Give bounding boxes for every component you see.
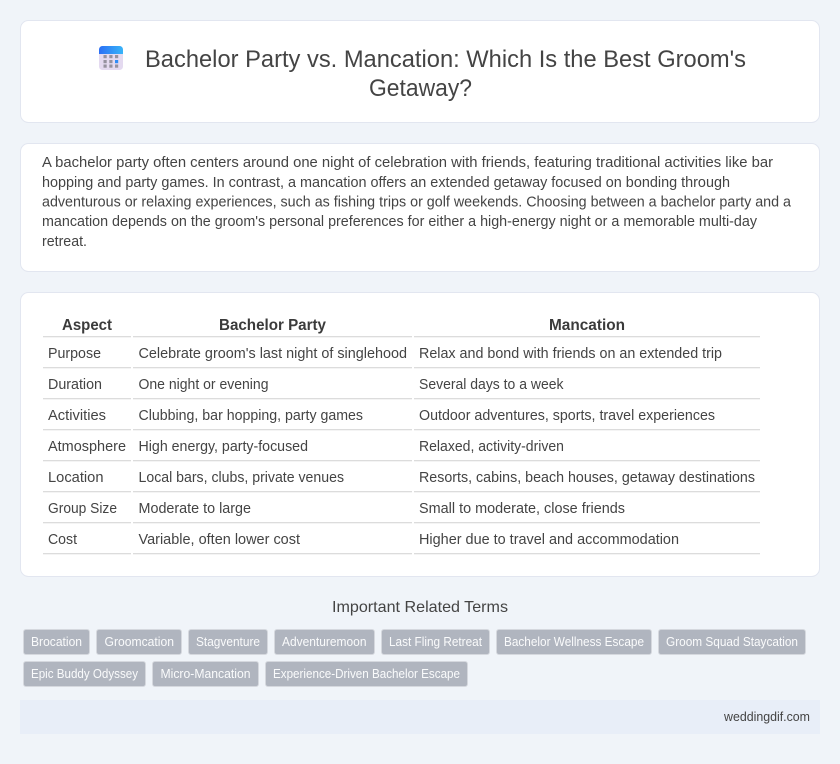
text block: introduction paragraph: adventurous or relaxing experiences, such as fishing trips or golf weekends. Choosing between a bachelor party and a <box>42 194 792 210</box>
tag: Brocation <box>24 630 90 654</box>
table header row <box>43 317 760 337</box>
table row: Activities: Clubbing, bar hopping, party games <box>138 408 363 424</box>
tag: Groom Squad Staycation: Groom Squad Staycation <box>666 634 798 649</box>
title: Getaway? <box>369 75 472 102</box>
text block: introduction paragraph: hopping and party games. In contrast, a mancation offers an extended getaway focused on bonding through <box>42 175 730 191</box>
tag: Groomcation <box>96 630 182 654</box>
footer <box>20 700 820 734</box>
tag: Groomcation: Groomcation <box>104 634 174 649</box>
table row: Duration: One night or evening <box>138 377 268 393</box>
panel: header <box>20 20 820 122</box>
table row: Location <box>43 470 760 492</box>
table row: Atmosphere: Relaxed, activity-driven <box>419 439 564 455</box>
tag: Experience-Driven Bachelor Escape <box>266 662 468 686</box>
table row: Cost: Variable, often lower cost <box>138 532 300 548</box>
table row: Group Size: Group Size <box>48 501 117 517</box>
table row: Group Size <box>43 501 760 523</box>
tag: Epic Buddy Odyssey <box>24 662 146 686</box>
tag: Adventuremoon: Adventuremoon <box>282 634 366 649</box>
text block: introduction paragraph: retreat. <box>42 234 87 250</box>
table row: Cost: Higher due to travel and accommodation <box>419 532 679 548</box>
tag: Micro-Mancation: Micro-Mancation <box>160 666 250 681</box>
table row: Activities <box>43 408 760 430</box>
table row: Duration: Several days to a week <box>419 377 564 393</box>
text block: introduction paragraph <box>42 155 792 250</box>
text block: introduction paragraph: mancation depends on the groom's personal preferences for either a high-energy night or a memorable multi-day <box>42 214 758 230</box>
table row: Cost <box>43 532 760 554</box>
panel: introduction <box>20 144 820 272</box>
table row: Cost: Cost <box>48 532 77 548</box>
tag: Stagventure: Stagventure <box>196 634 260 649</box>
tag: Epic Buddy Odyssey: Epic Buddy Odyssey <box>31 666 139 681</box>
tag: Experience-Driven Bachelor Escape: Experience-Driven Bachelor Escape <box>273 666 460 681</box>
title: Bachelor Party vs. Mancation: Which Is the Best Groom's <box>145 46 746 73</box>
tag: Bachelor Wellness Escape: Bachelor Wellness Escape <box>504 634 644 649</box>
table row: Location: Location <box>48 470 104 486</box>
title <box>145 46 746 102</box>
tag: Bachelor Wellness Escape <box>496 630 652 654</box>
tag cloud: related terms <box>24 630 806 686</box>
table row: Purpose: Celebrate groom's last night of singlehood <box>138 346 407 362</box>
panel: comparison table <box>20 292 820 576</box>
table row: Atmosphere: High energy, party-focused <box>138 439 308 455</box>
table row: Purpose: Purpose <box>48 346 101 362</box>
table header row: Bachelor Party <box>219 317 326 334</box>
table row: Atmosphere <box>43 439 760 461</box>
table row: Activities: Outdoor adventures, sports, travel experiences <box>419 408 715 424</box>
tag: Stagventure <box>188 630 268 654</box>
table row: Group Size: Small to moderate, close friends <box>419 501 625 517</box>
tag: Adventuremoon <box>274 630 374 654</box>
table row: Group Size: Moderate to large <box>138 501 251 517</box>
tag: Last Fling Retreat: Last Fling Retreat <box>389 634 482 649</box>
icon: calendar <box>99 46 123 70</box>
table header row: Aspect <box>62 317 112 334</box>
table row: Duration <box>43 377 760 399</box>
table row: Purpose <box>43 346 760 368</box>
table row: Duration: Duration <box>48 377 102 393</box>
table row: Purpose: Relax and bond with friends on an extended trip <box>419 346 722 362</box>
table header row: Mancation <box>549 317 625 334</box>
heading: important related terms: Important Related Terms <box>332 599 508 616</box>
tag: Last Fling Retreat <box>382 630 490 654</box>
tag: Brocation: Brocation <box>31 634 82 649</box>
table row: Location: Local bars, clubs, private venues <box>138 470 344 486</box>
tag: Micro-Mancation <box>152 662 258 686</box>
footer: weddingdif.com <box>723 710 810 724</box>
table row: Atmosphere: Atmosphere <box>48 439 126 455</box>
table row: Activities: Activities <box>48 408 106 424</box>
table row: Location: Resorts, cabins, beach houses, getaway destinations <box>419 470 755 486</box>
tag: Groom Squad Staycation <box>658 630 806 654</box>
text block: introduction paragraph: A bachelor party often centers around one night of celebration with friends, featuring traditional activities like bar <box>42 155 773 171</box>
